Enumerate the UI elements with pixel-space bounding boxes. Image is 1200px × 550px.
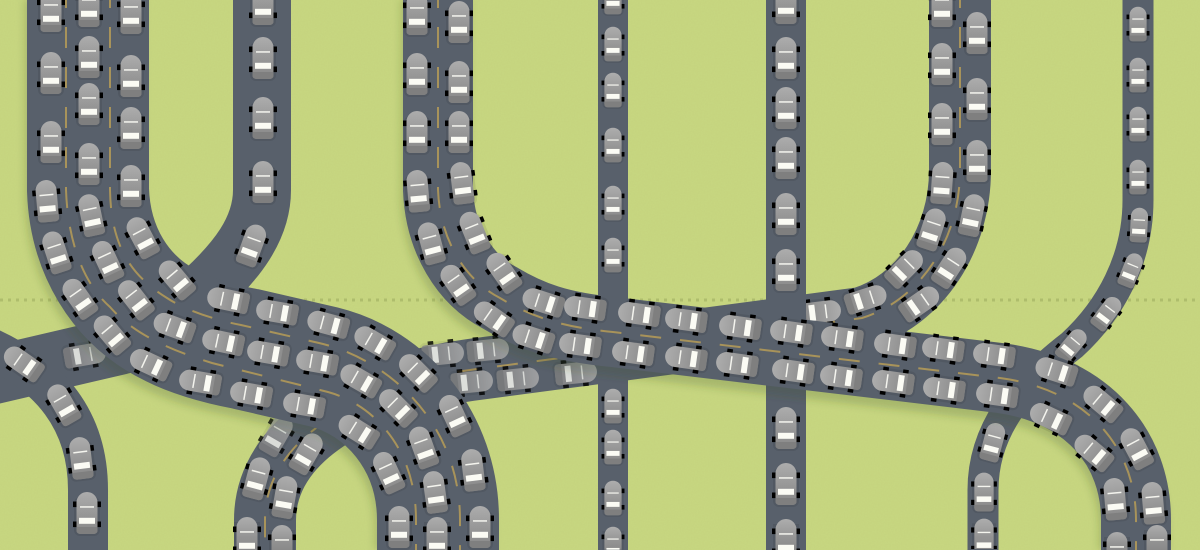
- cars: upper lane: [445, 1, 1171, 550]
- road: top road merging into the main road: [205, 0, 277, 290]
- road: narrow vertical road at x 613: [598, 0, 628, 550]
- road: three-lane main road from top left to bottom centre: [31, 0, 494, 550]
- cars on narrow road: [602, 0, 624, 550]
- lane marking: upper: [110, 0, 460, 550]
- cars in shaded crossing section: [419, 334, 598, 398]
- road: short left segment under the main road: [0, 334, 170, 376]
- car on left segment: [60, 338, 108, 373]
- cars on upper right curve: [795, 0, 991, 329]
- dotted field line: [0, 298, 1200, 302]
- road: vertical road at x 786: [766, 0, 806, 550]
- cars on vertical road: [772, 0, 800, 550]
- cars on lower curve: [233, 410, 330, 550]
- cars: right lane: [117, 0, 494, 550]
- cars: middle lane: [73, 0, 452, 550]
- cars on left curving road: [0, 339, 101, 536]
- road: two-lane band from top centre across to bottom right: [402, 0, 1171, 550]
- cars on right road: [971, 0, 1151, 549]
- road: right single-lane road curving under the band: [971, 0, 1151, 550]
- cars: left lane: [31, 0, 413, 550]
- cars on top road: [231, 0, 277, 271]
- cars: lower lane: [402, 0, 1131, 550]
- lane marking: band centre: [438, 0, 1136, 550]
- lane marking: lower: [66, 0, 416, 550]
- road: left curving road: [0, 339, 101, 550]
- road: two-lane road from top right passing under the main bands to bottom centre: [233, 0, 991, 550]
